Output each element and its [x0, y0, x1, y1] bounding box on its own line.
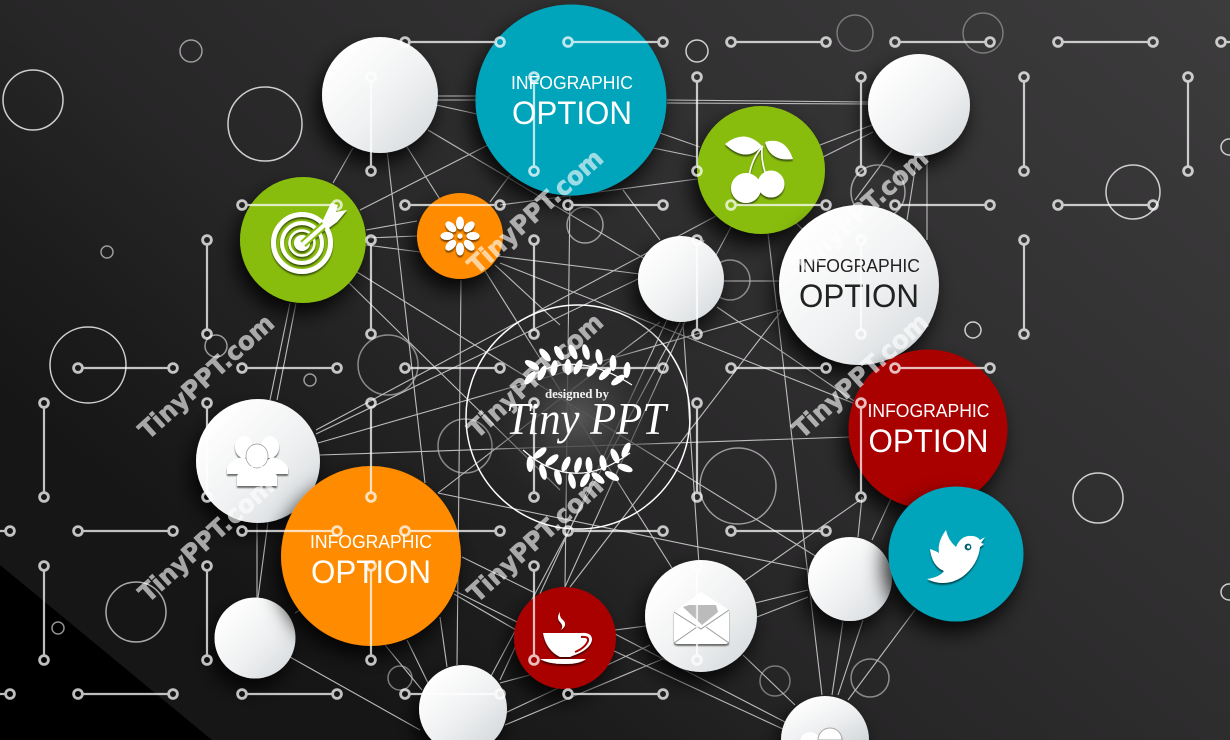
- node: teal infographic option: [476, 4, 666, 196]
- teal label: [511, 72, 633, 131]
- icon: bird: [927, 530, 985, 583]
- red node label: INFOGRAPHIC: [868, 400, 990, 421]
- node: orange flower: [417, 193, 503, 279]
- vertical grid connectors: [40, 73, 1192, 664]
- network connection lines: [257, 96, 927, 730]
- orange node label: INFOGRAPHIC: [310, 531, 432, 552]
- node: white users: [196, 399, 320, 523]
- node: red cup: [514, 587, 616, 689]
- node: white envelope: [645, 560, 757, 672]
- node: white top left: [322, 37, 438, 153]
- lower laurel branch: [523, 441, 634, 490]
- icon: target with arrow: [274, 203, 347, 272]
- node: green target: [240, 177, 366, 303]
- watermarks: TinyPPT.com: [133, 308, 280, 445]
- upper laurel branch: [522, 343, 632, 387]
- node: white right small: [808, 537, 892, 621]
- icon: envelope: [674, 592, 729, 644]
- watermarks: TinyPPT.com: [787, 143, 934, 280]
- watermarks: TinyPPT.com: [462, 143, 609, 280]
- emblem ring: [466, 305, 690, 529]
- red node label: OPTION: [868, 423, 988, 459]
- icon: coffee cup: [540, 612, 592, 664]
- teal label: OPTION: [512, 95, 632, 131]
- node: white center right: [638, 236, 724, 322]
- Tiny PPT logotype: Tiny PPT: [506, 393, 669, 444]
- center emblem: [466, 305, 690, 529]
- teal label: INFOGRAPHIC: [511, 72, 633, 93]
- white node label: OPTION: [799, 278, 919, 314]
- icon: cherries: [725, 136, 793, 203]
- icon: flower: [440, 216, 480, 256]
- node: white lower left: [214, 598, 296, 678]
- icon: users group: [227, 436, 288, 486]
- red node label: [868, 400, 990, 459]
- watermarks: TinyPPT.com: [787, 307, 934, 444]
- watermarks: TinyPPT.com: [133, 471, 280, 608]
- node: white top right: [868, 54, 970, 156]
- node: green cherries: [697, 106, 825, 234]
- white node label: [798, 255, 920, 314]
- orange node label: [310, 531, 432, 590]
- node: white bottom center: [419, 665, 507, 740]
- node: orange infographic option: [281, 466, 461, 646]
- icon: chat bubbles: [800, 728, 842, 740]
- node: teal twitter: [888, 486, 1024, 622]
- watermarks: [133, 143, 934, 608]
- white node label: INFOGRAPHIC: [798, 255, 920, 276]
- watermarks: TinyPPT.com: [462, 307, 609, 444]
- watermarks: TinyPPT.com: [462, 471, 609, 608]
- node: white infographic option: [779, 205, 939, 365]
- designed by label: designed by: [545, 386, 610, 401]
- node: red infographic option: [848, 350, 1008, 508]
- orange node label: OPTION: [311, 554, 431, 590]
- node: white bottom right: [781, 696, 869, 740]
